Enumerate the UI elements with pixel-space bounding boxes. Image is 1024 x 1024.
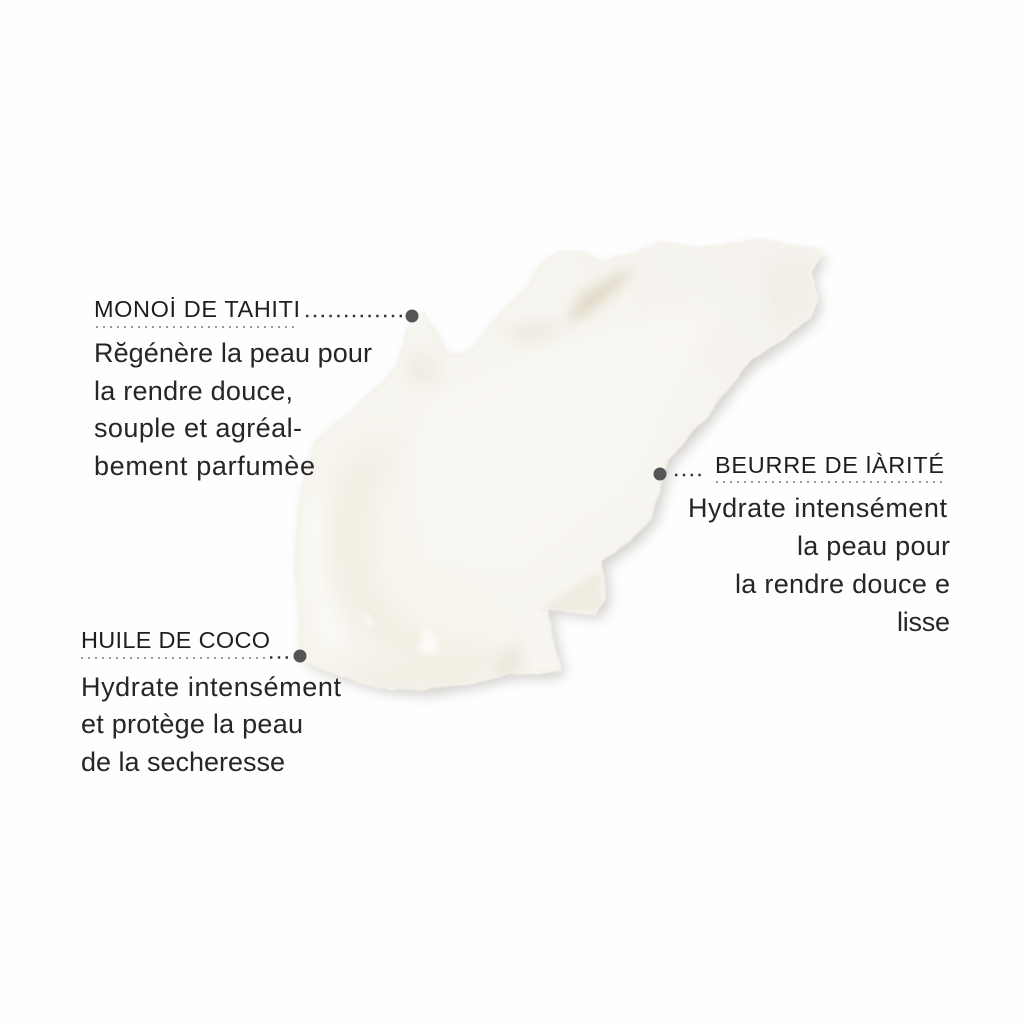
- description: bement parfumèe: [94, 451, 315, 481]
- marker dot: [406, 310, 418, 322]
- description: souple et agréal-: [94, 413, 302, 443]
- description: Rĕgénère la peau pour: [94, 338, 372, 368]
- heading underline: [81, 657, 270, 659]
- description: la rendre douce,: [94, 376, 293, 406]
- description: lisse: [897, 607, 950, 637]
- leader line: [675, 474, 706, 476]
- heading underline: [96, 326, 297, 328]
- shea and coconut balm swatch: [296, 239, 827, 696]
- description: et protège la peau: [81, 709, 303, 739]
- description: Hydrate intensément: [81, 672, 341, 702]
- description: la rendre douce e: [735, 569, 950, 599]
- heading: HUILE DE COCO: [81, 627, 270, 653]
- callout: Beurre de karité: [654, 452, 950, 637]
- description: Hydrate intensément: [688, 493, 947, 523]
- marker dot: [294, 650, 306, 662]
- description: [688, 493, 950, 637]
- leader line: [306, 315, 405, 317]
- description: de la secheresse: [81, 747, 285, 777]
- callout: Monoï de Tahiti: [94, 296, 418, 481]
- marker dot: [654, 468, 666, 480]
- heading: MONOİ DE TAHITI: [94, 296, 300, 322]
- heading: BEURRE DE lÀRITÉ: [715, 452, 944, 478]
- description: la peau pour: [797, 531, 950, 561]
- description: [81, 672, 341, 777]
- description: [94, 338, 372, 481]
- heading underline: [716, 481, 943, 483]
- leader line: [270, 656, 291, 659]
- callout: Huile de coco: [81, 627, 341, 777]
